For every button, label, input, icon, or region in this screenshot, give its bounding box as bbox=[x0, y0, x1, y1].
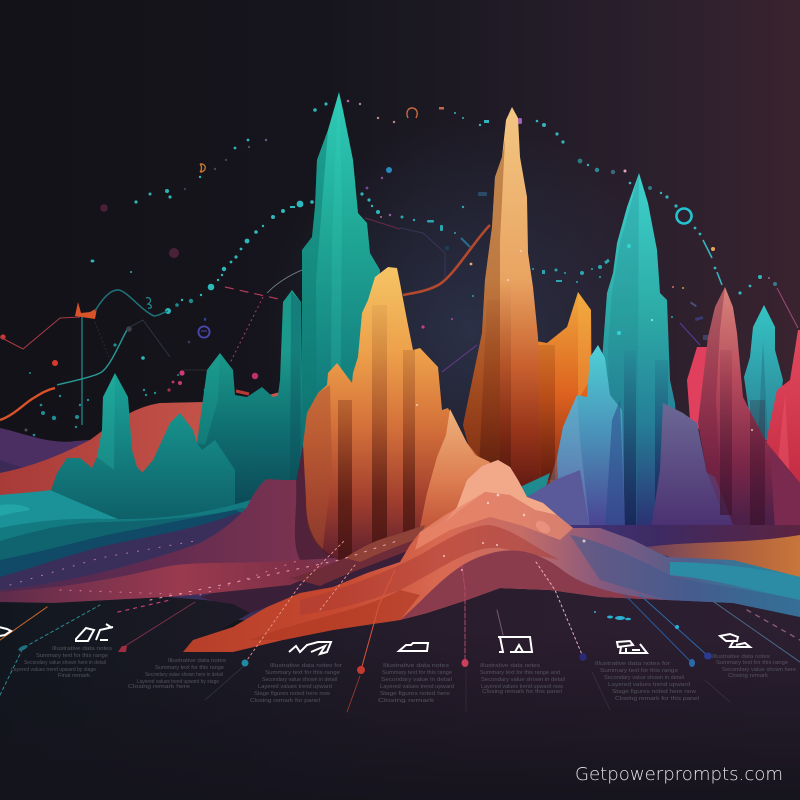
connector: far right bbox=[714, 602, 800, 662]
ribbon layer: violet fold bbox=[570, 535, 800, 617]
text block 6: Layered values trend upward bbox=[608, 682, 690, 688]
peak: teal small left bbox=[0, 373, 150, 530]
line-art icons bbox=[0, 624, 750, 654]
teal base lip bbox=[520, 473, 550, 497]
line to right red peak bbox=[777, 288, 798, 328]
peak: right teal bbox=[744, 305, 783, 440]
text block 5: Secondary value shown in detail bbox=[481, 677, 565, 683]
text block 3 bbox=[250, 663, 342, 704]
text block 4: Layered values trend upward bbox=[380, 684, 454, 690]
orange marker bbox=[75, 302, 97, 319]
shadow at foot of orange peak bbox=[295, 445, 335, 560]
peak: pink back bbox=[687, 347, 710, 440]
connector: teal left bbox=[0, 605, 100, 695]
teal arc bbox=[95, 290, 168, 316]
text block 1: Final remark bbox=[58, 673, 90, 679]
text block 7: Summary text for this range bbox=[716, 660, 788, 666]
mountains: back right group bbox=[463, 107, 800, 535]
back hills left bbox=[0, 392, 320, 540]
peak: tall orange bbox=[463, 107, 541, 490]
teal curve bbox=[57, 328, 128, 385]
peak: teal slim bbox=[268, 290, 303, 500]
text block 1: Layered values trend upward by stage bbox=[11, 667, 96, 673]
band: navy purple bbox=[0, 512, 280, 620]
text block 7: Closing remark bbox=[728, 673, 768, 679]
text block 3: Stage figures noted here now bbox=[254, 691, 330, 697]
text block 4: Illustrative data notes bbox=[383, 663, 450, 669]
orange facet left bbox=[300, 385, 332, 560]
text block 6: Closing remark for this panel bbox=[615, 696, 699, 702]
text block 2: Closing remark here bbox=[128, 684, 190, 690]
dark shadow in ribbon bbox=[250, 590, 420, 640]
text block 6: Stage figures noted here now bbox=[612, 689, 696, 695]
text block 6: Illustrative data notes for bbox=[595, 661, 670, 667]
orange thick curve bbox=[0, 388, 55, 420]
mountain: yellow-orange foreground bbox=[300, 267, 490, 570]
dotted arc: top right bbox=[347, 100, 777, 295]
text block 4 bbox=[378, 663, 454, 704]
pink dashes bbox=[225, 287, 283, 300]
icon 0 bbox=[0, 627, 11, 636]
icon 6 bbox=[720, 634, 750, 647]
connector: red bbox=[122, 602, 195, 648]
ring: orange omega bbox=[407, 108, 417, 118]
band: bright teal bbox=[0, 490, 120, 530]
text block 7: Secondary value shown here bbox=[722, 667, 796, 673]
dotted curve: behind orange and turquoise peaks bbox=[400, 192, 709, 340]
ribbon layer: salmon bbox=[415, 492, 573, 550]
layered terrain: left bands bbox=[0, 445, 425, 620]
text block 3: Layered values trend upward bbox=[258, 684, 332, 690]
peak: tall turquoise group bbox=[520, 173, 745, 535]
text block 3: Secondary value shown in detail bbox=[262, 677, 337, 683]
ribbon layer: red fold bbox=[300, 525, 560, 615]
text block 2 bbox=[128, 658, 226, 690]
hill: purple bbox=[0, 428, 230, 500]
flame front bbox=[405, 409, 490, 560]
scatter near left teal peak bbox=[24, 318, 249, 436]
peak: red central right bbox=[698, 287, 800, 530]
ribbon layer: teal lip bbox=[670, 562, 800, 600]
peak: teal tall bbox=[302, 92, 380, 500]
text block 3: Closing remark for panel bbox=[250, 698, 320, 704]
marker dots bbox=[0, 204, 258, 379]
tall orange stripes bbox=[478, 300, 500, 490]
text block 2: Layered values trend upward by stage bbox=[137, 679, 219, 685]
radial connector lines with dashes bbox=[0, 540, 800, 712]
text block 1: Secondary value shown here in detail bbox=[24, 660, 106, 666]
text block 2: Secondary value shown here in detail bbox=[145, 672, 223, 678]
orange stripes bbox=[372, 305, 387, 570]
text block 1 bbox=[11, 646, 112, 679]
drop markers bbox=[18, 644, 712, 674]
connector: pink dashes bbox=[118, 600, 170, 612]
ribbon layer: light pebble bbox=[534, 518, 552, 536]
text block 4: Secondary value in detail bbox=[381, 677, 452, 683]
swirl bbox=[146, 298, 151, 308]
text block 5: Summary text for this range and bbox=[480, 670, 560, 676]
text block 1: Illustrative data notes bbox=[52, 646, 112, 652]
ring: orange D bbox=[200, 164, 205, 172]
teal floor cluster bbox=[594, 611, 679, 629]
band: blue teal bbox=[0, 510, 280, 620]
turquoise stripes bbox=[624, 350, 636, 525]
text block 5: Illustrative data notes bbox=[480, 663, 540, 669]
text block 6: Secondary value shown in detail bbox=[604, 675, 684, 681]
left line chart and curves bbox=[0, 218, 400, 425]
bands: dark maroon toward centre bbox=[200, 540, 415, 613]
peak: teal mid ridge bbox=[195, 353, 287, 530]
connector: orange left bbox=[0, 607, 47, 640]
connector: blue bbox=[625, 595, 692, 663]
front ribbon: coral hill bbox=[183, 460, 800, 652]
hill: red bbox=[0, 392, 320, 540]
icon 5 bbox=[617, 641, 647, 653]
floor bbox=[0, 588, 800, 800]
text block 6 bbox=[595, 661, 699, 702]
layered terrain: right bands bbox=[520, 525, 800, 610]
dotted arc: upper left bbox=[92, 102, 328, 273]
connector: teal centre bbox=[245, 540, 345, 663]
watermark: Getpowerprompts.com bbox=[575, 764, 783, 785]
text block 2: Illustrative data notes bbox=[168, 658, 226, 664]
dotted trend lines in the sky bbox=[0, 100, 798, 436]
grey line bbox=[130, 320, 170, 357]
text block 5: Layered values trend upward now bbox=[481, 684, 563, 690]
connector: navy bbox=[536, 562, 583, 657]
text block 7: Illustrative data notes bbox=[712, 654, 770, 660]
icon 4 bbox=[498, 637, 532, 652]
icon 1 bbox=[76, 624, 113, 641]
purple slope bbox=[650, 403, 745, 535]
lines and ribbon behind orange peak bbox=[400, 225, 700, 372]
band: teal bbox=[0, 490, 280, 620]
band: bright maroon lower bbox=[0, 560, 330, 603]
icon 2 bbox=[289, 642, 331, 654]
text block 1: Summary text for this range bbox=[36, 653, 108, 659]
ribbon highlight: peak bbox=[445, 460, 557, 522]
turquoise small left peak bbox=[557, 345, 625, 530]
ring markers bbox=[198, 108, 692, 338]
connector: pink centre bbox=[462, 565, 465, 660]
text block 7 bbox=[712, 654, 796, 679]
band: deep teal bbox=[0, 508, 280, 620]
text block 5 bbox=[480, 663, 565, 695]
peak: teal second ridge bbox=[105, 413, 235, 530]
text block 2: Summary text for this range bbox=[155, 665, 224, 671]
vertical teal line bbox=[81, 317, 83, 425]
band: maroon wedge with hump bbox=[0, 445, 367, 603]
text block 6: Summary text for this range bbox=[600, 668, 678, 674]
ring: teal bbox=[676, 208, 692, 224]
connector: red centre bbox=[361, 570, 395, 670]
text block 4: Summary text for this range bbox=[382, 670, 452, 676]
text block 3: Illustrative data notes for bbox=[270, 663, 342, 669]
peak: red far right bbox=[760, 330, 800, 490]
tall orange left body bbox=[463, 140, 505, 490]
text block 4: Closing remark bbox=[378, 698, 435, 704]
ribbon layer: maroon arch bbox=[400, 550, 667, 620]
mountains: teal group bbox=[0, 92, 380, 530]
ring: purple bbox=[198, 319, 210, 338]
text block 4: Stage figures noted here bbox=[380, 691, 450, 697]
text block 5: Closing remark for this panel bbox=[482, 689, 562, 695]
text block 3: Summary text for this range bbox=[265, 670, 340, 676]
peak: orange right shoulder bbox=[520, 292, 592, 490]
speckles on mountains bbox=[416, 244, 753, 571]
dotted curve: middle bbox=[91, 167, 392, 314]
zig-zag red line bbox=[0, 317, 80, 349]
icon 3 bbox=[399, 643, 428, 651]
